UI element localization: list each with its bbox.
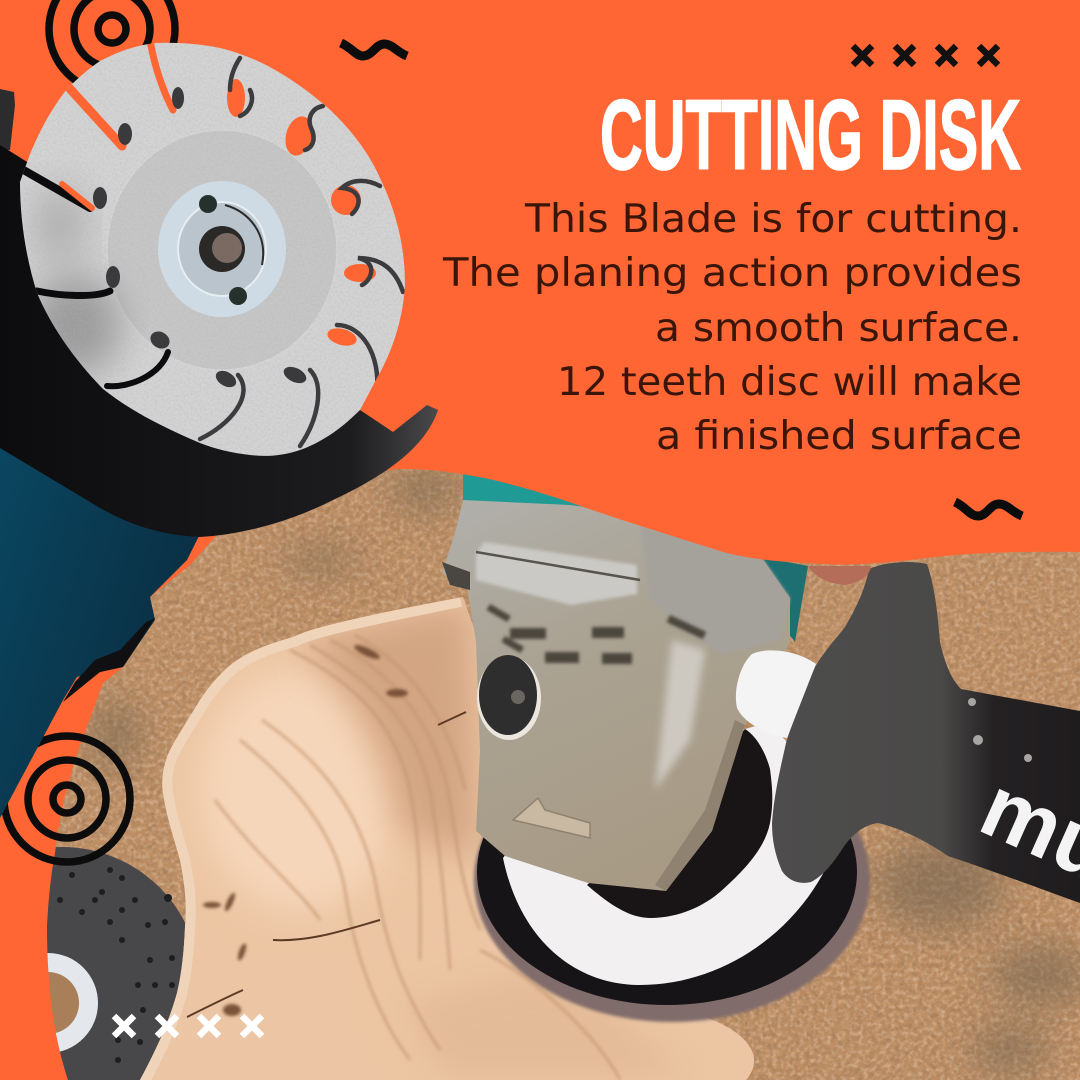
decoration: top crosses: [853, 46, 998, 65]
grinder gearbox body: [442, 500, 790, 891]
decoration: bottom crosses: [114, 1016, 262, 1036]
photo: grinder shaping a wood slab: [0, 460, 1080, 1080]
grinder round button: [477, 655, 541, 740]
description text: [442, 197, 1022, 459]
gearbox highlight strip: [655, 640, 705, 790]
cutting disc black centre: [587, 729, 772, 918]
gearbox notch: [513, 798, 590, 838]
black guard: [0, 145, 438, 537]
orange teardrop slots: [227, 79, 376, 349]
tool black trim: [63, 618, 155, 702]
handle specks: [968, 698, 1032, 762]
spare disc bottom-left: [0, 847, 200, 1080]
sawdust texture dark: [40, 460, 1080, 1080]
description text: a finished surface: [656, 414, 1022, 459]
gearbox right edge: [655, 720, 745, 891]
blade grain: [22, 43, 405, 454]
wood marks: [203, 642, 408, 1016]
hub pin holes: [199, 195, 247, 305]
blade inner disc: [107, 130, 337, 370]
orange slots upper: [20, 40, 173, 208]
blade black slots lower: [37, 291, 168, 386]
description text: a smooth surface.: [655, 306, 1022, 351]
blade hub: [158, 181, 286, 317]
silver blade: [10, 35, 420, 465]
white spacer collar: [736, 650, 816, 738]
cutting disc black ring: [477, 739, 857, 1005]
grinder teal housing: [463, 470, 600, 530]
decoration: concentric circles bottom-left: [4, 736, 130, 862]
teal housing rear: [750, 555, 808, 642]
cutting disc white ring: [503, 722, 835, 985]
grey soil patches: [89, 468, 1080, 1074]
gearbox vents: [486, 604, 706, 664]
blade tooth grooves: [200, 58, 403, 446]
grinder handle: [772, 562, 1080, 903]
sawdust ground: [40, 460, 1080, 1080]
tool body: [0, 445, 200, 818]
description text: This Blade is for cutting.: [524, 197, 1022, 242]
blade shading: [29, 275, 121, 375]
blade slot holes: [93, 87, 309, 391]
angle grinder tool top-left: [0, 35, 438, 818]
spindle: [199, 226, 245, 272]
gearbox upper shade: [640, 525, 790, 655]
description text: 12 teeth disc will make: [557, 360, 1022, 405]
sawdust texture light: [40, 460, 1080, 1080]
wood tones: [140, 597, 700, 1080]
decoration: top squiggle: [341, 43, 407, 56]
gearbox top plate: [476, 542, 637, 605]
gearbox left clip: [442, 562, 470, 590]
slab pale rim: [140, 597, 460, 1080]
description text: The planing action provides: [442, 251, 1022, 296]
operator finger: [808, 566, 871, 585]
wood slab: [140, 597, 754, 1080]
cutting disc outer rim: [474, 738, 870, 1022]
guard side tab: [0, 89, 15, 150]
decoration: lower squiggle: [955, 502, 1022, 516]
decoration: concentric circles top: [49, 0, 175, 92]
